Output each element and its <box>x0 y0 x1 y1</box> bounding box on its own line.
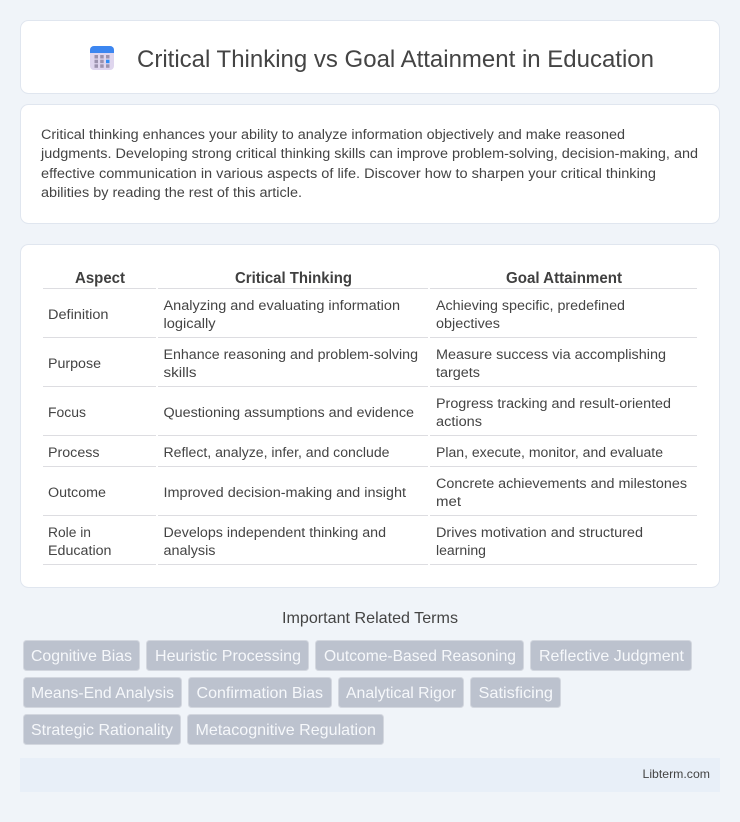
table row: process <box>48 445 663 461</box>
table row: focus: Progress tracking and result-oriented <box>436 396 671 412</box>
related term tags: Confirmation Bias <box>196 685 323 702</box>
table row: focus: Questioning assumptions and evidence <box>164 405 414 421</box>
table row: purpose: skills <box>164 365 196 381</box>
related term tags: Metacognitive Regulation <box>196 722 376 739</box>
footer: Libterm.com <box>642 767 710 781</box>
related term tags: Outcome-Based Reasoning <box>324 648 516 665</box>
table row: process: Reflect, analyze, infer, and conclude <box>164 445 390 461</box>
table header <box>75 270 622 287</box>
related term tags: Heuristic Processing <box>155 648 301 665</box>
table header: Critical Thinking <box>235 270 352 287</box>
table row: role in education: Role in <box>48 525 91 541</box>
table row: role in education <box>48 525 643 559</box>
text block: introduction: abilities by reading the rest of this article. <box>41 185 302 201</box>
related term tags: Cognitive Bias <box>31 648 132 665</box>
table row: role in education: analysis <box>164 543 216 559</box>
table row: process: Process <box>48 445 100 461</box>
table header: Goal Attainment <box>506 270 622 287</box>
related term tags: Satisficing <box>478 685 553 702</box>
table row: definition: Definition <box>48 307 108 323</box>
title: Critical Thinking vs Goal Attainment in Education <box>137 46 654 73</box>
table row: definition <box>48 298 625 332</box>
table row: purpose: Enhance reasoning and problem-solving <box>164 347 418 363</box>
related term tags: Strategic Rationality <box>31 722 173 739</box>
panel: comparison table <box>20 244 720 588</box>
related term tags: Reflective Judgment <box>539 648 685 665</box>
related term tags: Means-End Analysis <box>31 685 174 702</box>
panel: header <box>20 20 720 94</box>
heading: related terms: Important Related Terms <box>282 610 458 627</box>
text block: introduction: judgments. Developing strong critical thinking skills can improve problem-solving, decision-making, and <box>40 146 698 162</box>
footer <box>20 758 720 792</box>
icon: calendar <box>90 46 114 70</box>
table header: Aspect <box>75 270 125 287</box>
table row: role in education: learning <box>436 543 486 559</box>
table row: purpose <box>48 347 666 381</box>
table row: outcome <box>48 476 687 510</box>
table row: focus: actions <box>436 414 482 430</box>
related term tags: Analytical Rigor <box>346 685 456 702</box>
table row: outcome: Improved decision-making and insight <box>164 485 406 501</box>
table row: role in education: Education <box>48 543 112 559</box>
table row: definition: objectives <box>436 316 500 332</box>
table row: process: Plan, execute, monitor, and evaluate <box>436 445 663 461</box>
table row: role in education: Develops independent thinking and <box>164 525 386 541</box>
table row: purpose: targets <box>436 365 480 381</box>
table row: focus: Focus <box>48 405 86 421</box>
table row: purpose: Purpose <box>48 356 101 372</box>
table row: outcome: Outcome <box>48 485 106 501</box>
text block: introduction <box>40 127 698 201</box>
table row: definition: Achieving specific, predefined <box>436 298 625 314</box>
table row: outcome: met <box>436 494 461 510</box>
text block: introduction: Critical thinking enhances your ability to analyze information objectively and make reasoned <box>41 127 625 143</box>
table row: role in education: Drives motivation and structured <box>436 525 643 541</box>
related term tags <box>24 640 692 744</box>
table row: definition: Analyzing and evaluating information <box>164 298 400 314</box>
table row: definition: logically <box>164 316 216 332</box>
table row: focus <box>48 396 671 430</box>
table row: outcome: Concrete achievements and milestones <box>436 476 687 492</box>
table row: purpose: Measure success via accomplishing <box>436 347 666 363</box>
panel: introduction <box>20 104 720 224</box>
text block: introduction: effective communication in various aspects of life. Discover how to sharpen your critical thinking <box>41 166 656 182</box>
